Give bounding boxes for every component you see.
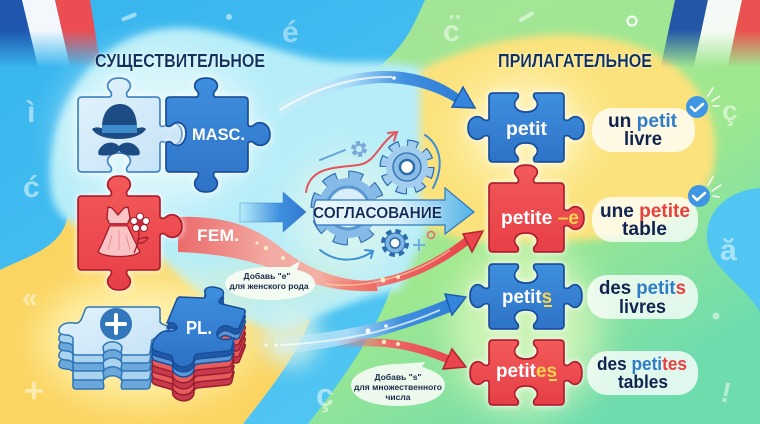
gear small [354, 144, 364, 154]
callout: add s: числа [385, 392, 411, 402]
callout: add s: для множественного [354, 382, 442, 392]
arrow: masculine to petit [276, 71, 475, 118]
decoration: accent letters: é [282, 16, 299, 49]
example: une petite table: table [622, 219, 667, 240]
plural stack: blue and red pieces [152, 287, 245, 401]
piece: masculine MASC. [166, 78, 270, 192]
decoration: French flag right [661, 0, 760, 66]
label: MASC.: MASC. [192, 125, 245, 144]
piece: petits [470, 264, 582, 329]
label: agreement: СОГЛАСОВАНИЕ [313, 205, 442, 222]
decoration: accent letters: ì [26, 96, 35, 129]
plus and ring [413, 232, 434, 251]
label: petits: petits [502, 287, 552, 308]
gear lower [384, 232, 406, 254]
piece: feminine noun [78, 176, 182, 290]
agreement mechanism [306, 132, 474, 260]
arcs around gears [306, 132, 440, 260]
decoration: French flag left [0, 0, 100, 66]
arrow: plural to petites [335, 340, 466, 369]
label: FEM.: FEM. [197, 226, 239, 245]
example: un petit livre [592, 108, 695, 152]
callout: add s [351, 362, 445, 406]
banner arrow [314, 188, 474, 234]
ribbon: feminine to petite [178, 217, 483, 291]
piece: masculine noun [78, 78, 182, 172]
badge: check 2 [688, 177, 721, 207]
example: des petits livres: des petits [599, 278, 686, 299]
gear upper [384, 144, 430, 190]
callout text: Добавь "е" [244, 271, 290, 281]
decoration: accent letters: ç [722, 95, 738, 126]
icon: dress and flower [98, 207, 150, 256]
callout: add e [225, 261, 315, 300]
arrow: noun to agreement [240, 192, 306, 232]
piece: petites [470, 340, 582, 405]
label: petit: petit [506, 119, 548, 140]
example: un petit livre: livre [624, 129, 662, 150]
decoration: accent letters: ă [720, 234, 737, 267]
heading: adjective: ПРИЛАГАТЕЛЬНОЕ [498, 51, 652, 71]
badge: check 1 [686, 88, 720, 118]
decoration: accent letters: c̈ [443, 15, 460, 48]
label: petite -e: petite –e [501, 208, 579, 229]
example: des petites tables: des petites [597, 354, 687, 374]
plural stack: light pieces [59, 307, 171, 389]
icon: plus circle [100, 308, 132, 340]
example: des petites tables [587, 351, 698, 395]
decoration: accent letters: ! [718, 376, 734, 409]
decoration: accent letters: ç [316, 377, 334, 413]
gear large [316, 176, 380, 240]
decoration: accent letters: « [22, 282, 38, 313]
callout: add e: для женского рода [229, 281, 309, 291]
callout text: Добавь "s" [375, 372, 421, 382]
piece: petit [468, 93, 584, 162]
icon: bowler hat and moustache [92, 104, 146, 156]
example: des petits livres: livres [619, 297, 666, 318]
decoration: accent letters: ć [23, 171, 40, 204]
heading: noun: СУЩЕСТВИТЕЛЬНОЕ [95, 51, 265, 71]
decoration: accent letters: + [24, 372, 44, 410]
example: une petite table: une petite [600, 201, 690, 222]
example: des petites tables: tables [618, 372, 668, 392]
label: petites: petites [496, 361, 557, 382]
piece: petite [489, 165, 584, 252]
label: PL.: PL. [186, 318, 212, 338]
example: des petits livres [587, 275, 698, 319]
arrow: plural to petits [264, 294, 466, 354]
example: une petite table [592, 197, 698, 242]
example: un petit livre: un petit [608, 111, 678, 132]
